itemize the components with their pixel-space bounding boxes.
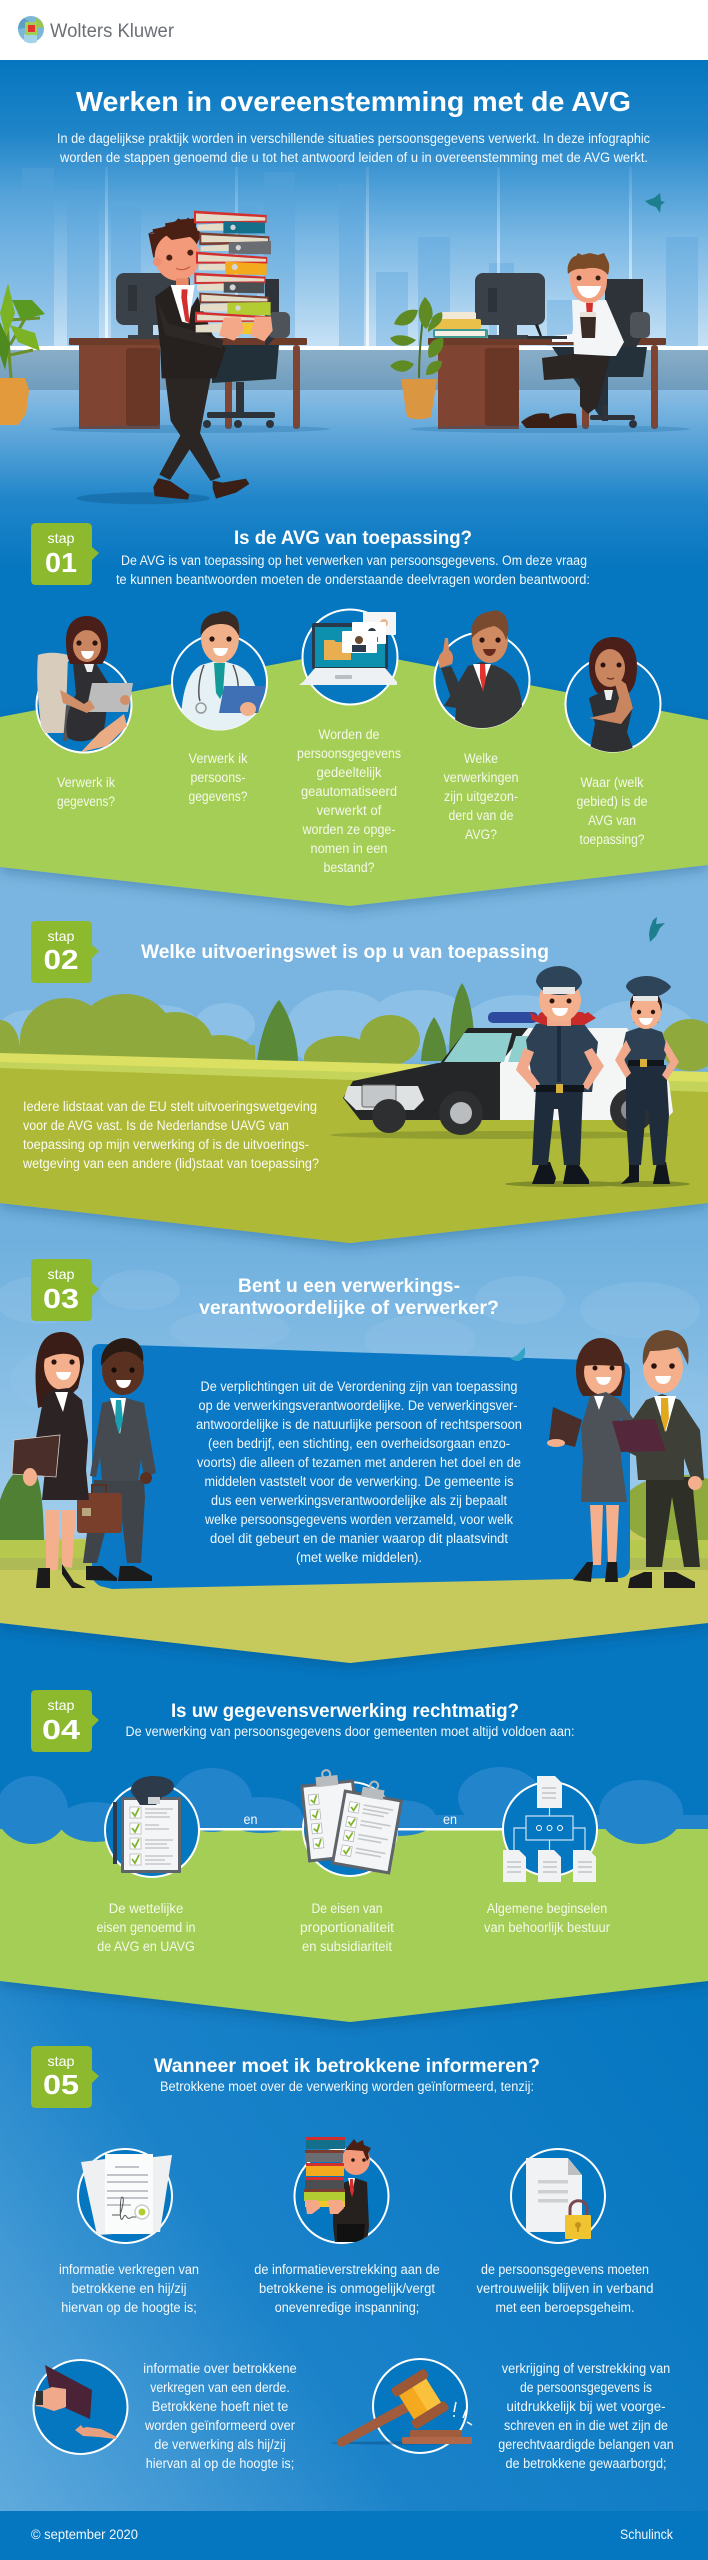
text: captions stap 05 row 1: onevenredige inspanning; (275, 2300, 419, 2315)
text: stap 02 body: toepassing op mijn verwerking of is de uitvoerings- (23, 1137, 309, 1152)
panel: stap 03 (0, 1259, 708, 1589)
badge: stap 01: stap (48, 530, 75, 546)
text: circle captions stap 01: verwerkingen (444, 770, 518, 785)
icon: bird on card (510, 1347, 525, 1361)
right monitor (475, 273, 545, 339)
text: captions stap 05 row 2 right: de persoonsgegevens is (520, 2380, 652, 2395)
copyright: © september 2020 (31, 2527, 138, 2542)
text: captions stap 05 row 2 left: Betrokkene hoeft niet te (152, 2399, 288, 2414)
text: circle captions stap 01: AVG van (588, 813, 636, 828)
text: captions stap 05 row 1: de informatieverstrekking aan de (254, 2262, 440, 2277)
icon: laptop with profile cards (299, 610, 398, 704)
person: police officer man (505, 966, 625, 1187)
text: captions stap 04: eisen genoemd in (96, 1920, 196, 1935)
text: circle captions stap 01 (57, 727, 648, 875)
text: captions stap 05 row 2 right (498, 2361, 674, 2471)
text: captions stap 05 row 1: vertrouwelijk blijven in verband (476, 2281, 654, 2296)
text: stap 03 body: op de verwerkingsverantwoordelijke. De verwerkingsver- (198, 1398, 518, 1413)
icon: bird (649, 917, 665, 942)
text: captions stap 04: Algemene beginselen (487, 1901, 607, 1916)
intro text (57, 131, 650, 165)
badge: stap 01 (31, 523, 99, 585)
text: circle captions stap 01: gegevens? (57, 794, 115, 809)
text: captions stap 04: De eisen van (312, 1901, 382, 1916)
text: circle captions stap 01: gebied) is de (576, 794, 648, 809)
clouds (0, 1767, 708, 1844)
heading: stap 02: Welke uitvoeringswet is op u van toepassing (141, 942, 549, 963)
text: circle captions stap 01: nomen in een (310, 841, 388, 856)
text: stap 01 intro: De AVG is van toepassing op het verwerken van persoonsgegevens. Om deze vraag (121, 553, 587, 568)
text: stap 05 intro: Betrokkene moet over de verwerking worden geïnformeerd, tenzij: (160, 2079, 534, 2094)
text: captions stap 05 row 2 left: worden geïnformeerd over (144, 2418, 295, 2433)
badge: stap 02 (31, 921, 99, 983)
left monitor (116, 273, 190, 339)
badge: stap 04: 04 (42, 1714, 81, 1745)
wall skirting (0, 346, 708, 390)
panel: stap 02 (0, 917, 708, 1243)
text: captions stap 04: de AVG en UAVG (97, 1939, 195, 1954)
heading: stap 01: Is de AVG van toepassing? (234, 528, 472, 549)
left plant (0, 283, 45, 425)
text: captions stap 05 row 2 right: schreven en in die wet zijn de (504, 2418, 668, 2433)
text: stap 01 intro (116, 553, 590, 587)
text: captions stap 05 row 1: hiervan op de hoogte is; (61, 2300, 197, 2315)
text: captions stap 05 row 2 right: uitdrukkelijk bij wet voorge- (506, 2399, 666, 2414)
heading: stap 03: verantwoordelijke of verwerker? (199, 1298, 499, 1319)
icon: handing over folder (34, 2360, 128, 2454)
text: circle captions stap 01: toepassing? (580, 832, 644, 847)
text: circle captions stap 01: Worden de (318, 727, 380, 742)
text: circle captions stap 01: Verwerk ik (57, 775, 115, 790)
text: stap 02 body: Iedere lidstaat van de EU stelt uitvoeringswetgeving (23, 1099, 317, 1114)
text: circle captions stap 01: verwerkt of (316, 803, 382, 818)
icon: Wolters Kluwer globe logo (18, 16, 44, 43)
text: captions stap 04: van behoorlijk bestuur (484, 1920, 610, 1935)
text: stap 03 body: middelen vaststelt voor de verwerking. De gemeente is (204, 1474, 514, 1489)
text: captions stap 05 row 2 left: verkregen van een derde. (150, 2380, 290, 2395)
person: police officer woman (600, 976, 690, 1187)
icon: judge gavel (330, 2359, 472, 2453)
text: captions stap 05 row 2 left: hiervan al op de hoogte is; (146, 2456, 294, 2471)
badge: stap 05: stap (48, 2053, 75, 2069)
text: stap 02 body (22, 1099, 319, 1171)
text: captions stap 05 row 2 left: informatie over betrokkene (143, 2361, 297, 2376)
icon: businessman pointing up (434, 610, 530, 736)
text: stap 01 intro: te kunnen beantwoorden moeten de onderstaande deelvragen worden beantwoord: (116, 572, 590, 587)
text: stap 03 body: welke persoonsgegevens worden verzameld, voor welk (204, 1512, 513, 1527)
text: captions stap 05 row 1: de persoonsgegevens moeten (481, 2262, 649, 2277)
logo wordmark: Wolters Kluwer (50, 21, 175, 42)
person: woman with portfolio (12, 1332, 89, 1588)
badge: stap 04 (31, 1690, 99, 1752)
illustration: police car (330, 1012, 673, 1139)
text: stap 03 body: antwoordelijke is de natuurlijke persoon of rechtspersoon (196, 1417, 522, 1432)
skyline and window frames (0, 167, 698, 346)
icon: doctor (172, 611, 267, 735)
text: circle captions stap 01: geautomatiseerd (301, 784, 397, 799)
intro text: In de dagelijkse praktijk worden in verschillende situaties persoonsgegevens verwerkt. In deze infographic (57, 131, 650, 146)
text: circle captions stap 01: persoonsgegevens (297, 746, 401, 761)
icon: bird (645, 193, 665, 213)
title: Werken in overeenstemming met de AVG (76, 86, 631, 117)
text: captions stap 05 row 1: informatie verkregen van (59, 2262, 199, 2277)
text: stap 03 body: dus een verwerkingsverantwoordelijke als zij bepaalt (211, 1493, 507, 1508)
text: stap 03 body: voorts) die alleen of tezamen met anderen het doel en de (197, 1455, 521, 1470)
text: captions stap 05 row 2 left: de verwerking als hij/zij (154, 2437, 286, 2452)
text: captions stap 05 row 2 right: gerechtvaardigde belangen van (498, 2437, 674, 2452)
text: captions stap 04: De wettelijke (109, 1901, 183, 1916)
icon: checklist with police cap (105, 1776, 199, 1877)
left office chair (203, 279, 290, 428)
text: captions stap 04: en subsidiariteit (302, 1939, 392, 1954)
text: circle captions stap 01: zijn uitgezon- (444, 789, 518, 804)
icon: document hierarchy (503, 1776, 597, 1882)
label: en: en (443, 1812, 457, 1827)
heading: stap 05: Wanneer moet ik betrokkene informeren? (154, 2056, 540, 2077)
heading: stap 03: Bent u een verwerkings- (238, 1276, 460, 1297)
icon: document with lock (511, 2149, 605, 2243)
intro text: worden de stappen genoemd die u tot het antwoord leiden of u in overeenstemming met de AVG werkt. (59, 150, 648, 165)
footer (31, 2527, 673, 2542)
panel: hero office scene (0, 167, 708, 504)
text: circle captions stap 01: derd van de (448, 808, 514, 823)
label: en: en (244, 1812, 258, 1827)
panel: blue text card (92, 1344, 630, 1589)
text: circle captions stap 01: Waar (welk (580, 775, 644, 790)
books on desk (431, 312, 488, 338)
person: woman with tablet (547, 1338, 634, 1582)
badge: stap 03: 03 (43, 1283, 79, 1314)
connector line (199, 1828, 503, 1830)
badge: stap 01: 01 (45, 547, 77, 578)
text: captions stap 05 row 1: met een beroepsgeheim. (496, 2300, 634, 2315)
badge: stap 05 (31, 2046, 99, 2108)
text: captions stap 05 row 1: betrokkene en hij/zij (72, 2281, 186, 2296)
panel: stap 05 (31, 2046, 674, 2471)
credit: Schulinck (620, 2527, 673, 2542)
panel: stap 04 (0, 1690, 708, 1954)
badge: stap 05: 05 (43, 2069, 79, 2100)
badge: stap 03: stap (48, 1266, 75, 1282)
badge: stap 02: stap (48, 928, 75, 944)
text: captions stap 05 row 2 left (143, 2361, 297, 2471)
heading: stap 03 (199, 1276, 499, 1319)
text: circle captions stap 01: Welke (464, 751, 498, 766)
badge: stap 02: 02 (44, 944, 78, 975)
person: man carrying binders (77, 211, 273, 504)
text: stap 02 body: voor de AVG vast. Is de Nederlandse UAVG van (23, 1118, 289, 1133)
text: captions stap 05 row 1 (59, 2262, 654, 2315)
desk plant (390, 297, 443, 419)
text: circle captions stap 01: gegevens? (188, 789, 248, 804)
icon: two clipboards (299, 1767, 405, 1876)
landscape: clouds, trees, ground (0, 1270, 708, 1570)
person: seated man at desk (521, 253, 650, 428)
person: man with clipboard (612, 1330, 704, 1588)
text: circle captions stap 01: AVG? (465, 827, 497, 842)
text: stap 03 body: (een bedrijf, een stichting, een overheidsorgaan enzo- (208, 1436, 510, 1451)
text: stap 04 intro: De verwerking van persoonsgegevens door gemeenten moet altijd voldoen aan: (126, 1724, 574, 1739)
header with logo (18, 16, 175, 43)
badge: stap 04: stap (48, 1697, 75, 1713)
text: captions stap 05 row 2 right: verkrijging of verstrekking van (502, 2361, 670, 2376)
text: stap 03 body: (met welke middelen). (296, 1550, 422, 1565)
text: circle captions stap 01: Verwerk ik (188, 751, 248, 766)
text: circle captions stap 01: bestand? (324, 860, 374, 875)
text: stap 03 body: doel dit gebeurt en de manier waarop dit plaatsvindt (210, 1531, 508, 1546)
icon: man with binders (294, 2137, 388, 2243)
heading: stap 04: Is uw gegevensverwerking rechtmatig? (171, 1701, 519, 1722)
text: stap 03 body: De verplichtingen uit de Verordening zijn van toepassing (200, 1379, 518, 1394)
text: circle captions stap 01: gedeeltelijk (316, 765, 382, 780)
text: circle captions stap 01: persoons- (190, 770, 246, 785)
badge: stap 03 (31, 1259, 99, 1321)
text: captions stap 04: proportionaliteit (300, 1920, 394, 1935)
landscape: clouds, bushes, trees, ground (0, 983, 708, 1243)
text: stap 02 body: wetgeving van een andere (lid)staat van toepassing? (22, 1156, 319, 1171)
text: captions stap 04 (96, 1901, 610, 1954)
text: captions stap 05 row 2 right: de betrokkene gewaarborgd; (506, 2456, 666, 2471)
text: circle captions stap 01: worden ze opge- (302, 822, 396, 837)
person: man with briefcase (77, 1338, 156, 1581)
text: stap 03 body (196, 1379, 522, 1565)
left desk (50, 338, 330, 433)
icon: signed documents (78, 2149, 172, 2243)
right desk (410, 338, 690, 433)
panel: stap 01 (31, 523, 660, 875)
text: captions stap 05 row 1: betrokkene is onmogelijk/vergt (259, 2281, 435, 2296)
icon: thinking woman (566, 637, 660, 754)
icon: woman with laptop (36, 616, 133, 752)
